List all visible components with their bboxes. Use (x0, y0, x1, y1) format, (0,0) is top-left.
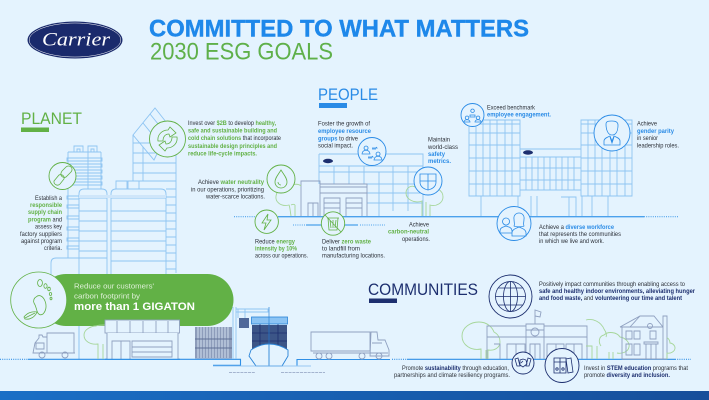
text: employee engagement (487, 106, 551, 118)
text: gender parity: Achieve (637, 122, 658, 128)
footer band (0, 391, 709, 400)
text: safety metrics (427, 138, 458, 165)
icon: water drop (267, 165, 295, 193)
icon: recycle arrows (150, 121, 186, 157)
text: diverse workforce (539, 225, 621, 245)
text: $2B investment goal: cold chain solutions that incorporate (188, 136, 282, 142)
text: positively impact communities: safe and healthy indoor environments, alleviating hunger (539, 289, 696, 295)
title: COMMITTED TO WHAT MATTERS (149, 16, 529, 42)
text: energy intensity (255, 240, 308, 260)
text: responsible supply chain: Establish a (35, 196, 63, 202)
icon: gender parity leader (594, 115, 630, 151)
heading: COMMUNITIES: COMMUNITIES (368, 280, 478, 299)
text: water neutrality (191, 180, 265, 200)
icon: employee resource groups (358, 138, 386, 166)
heading: PLANET: PLANET (21, 109, 82, 128)
text: diverse workforce: that represents the communities (539, 232, 621, 238)
text: positively impact communities (539, 282, 696, 302)
text: gender parity: in senior (637, 136, 658, 142)
text: carbon-neutral (388, 222, 430, 243)
text: employee engagement: Exceed benchmark (487, 106, 536, 112)
text: promote sustainability (394, 366, 510, 379)
icon: binders (545, 348, 579, 382)
text: $2B investment goal: reduce life-cycle impacts. (188, 152, 257, 158)
text: responsible supply chain: supply chain (28, 210, 62, 216)
text: positively impact communities: Positively impact communities through enabling access to (539, 282, 686, 288)
icon: globe (489, 275, 532, 318)
text: gender parity: leadership roles. (637, 144, 679, 150)
text: safety metrics: Maintain (428, 138, 450, 144)
logo: Carrier: Carrier (42, 30, 111, 50)
text: gender parity (637, 122, 679, 150)
callout: 1 gigaton pill: Reduce our customers' (74, 282, 155, 290)
text: responsible supply chain: assess key (35, 224, 62, 230)
illustration: headquarters office (469, 120, 632, 217)
text: employee resource groups: social impact. (318, 144, 353, 150)
text: water neutrality: water-scarce locations. (205, 194, 265, 200)
illustration: container yard and crane (195, 307, 268, 359)
text: safety metrics: world-class (427, 145, 458, 151)
callout: 1 gigaton pill (11, 272, 234, 328)
callout: 1 gigaton pill: carbon footprint by (74, 292, 140, 300)
text: employee resource groups: employee resource (318, 129, 372, 135)
icon: diverse workforce (497, 206, 531, 240)
ground lines (0, 217, 691, 366)
text: zero waste: to landfill from (322, 246, 360, 252)
text: diverse workforce: Achieve a diverse workforce (539, 225, 615, 231)
icon: engagement team (461, 104, 484, 126)
text: $2B investment goal (188, 121, 282, 158)
illustration: semi truck (311, 332, 389, 359)
icon: safety shield (414, 167, 442, 195)
text: promote sustainability: partnerships and climate resiliency programs. (394, 373, 510, 379)
text: water neutrality: Achieve water neutrality (198, 180, 265, 186)
text: carbon-neutral: carbon-neutral (388, 230, 429, 236)
text: responsible supply chain: criteria. (44, 246, 62, 252)
text: responsible supply chain: against program (21, 239, 62, 245)
text: energy intensity: Reduce energy (255, 240, 296, 246)
icon: footprint leaf (24, 280, 52, 319)
text: employee resource groups: groups to drive (318, 136, 359, 142)
text: responsible supply chain: factory suppliers (20, 232, 62, 238)
title: 2030 ESG GOALS (150, 38, 333, 66)
illustration: delivery truck (33, 333, 75, 358)
title (149, 16, 529, 66)
text: employee resource groups: Foster the growth of (318, 122, 370, 128)
illustration: house (620, 316, 675, 359)
icon: chain link (49, 162, 76, 190)
text: employee engagement: employee engagement. (487, 112, 551, 118)
text: STEM education: Invest in STEM education programs that (584, 366, 688, 372)
text: promote sustainability: Promote sustainability through education, (402, 366, 509, 372)
text: STEM education (584, 366, 688, 379)
text: $2B investment goal: sustainable design principles and (188, 144, 277, 150)
text: diverse workforce: in which we live and work. (539, 239, 604, 245)
text: gender parity: gender parity (637, 129, 675, 135)
illustration: cargo ship (213, 307, 325, 372)
text: energy intensity: intensity by 10% (255, 246, 298, 252)
text: carbon-neutral: Achieve (409, 222, 430, 228)
text: $2B investment goal: safe and sustainable building and (188, 128, 277, 134)
text: safety metrics: safety (428, 152, 446, 158)
text: responsible supply chain: responsible (30, 203, 63, 209)
text: positively impact communities: and food waste, and volunteering our time and talent (539, 296, 682, 302)
text: $2B investment goal: Invest over $2B to develop healthy, (188, 121, 276, 127)
logo: Carrier (28, 22, 122, 58)
text: zero waste: Deliver zero waste (322, 240, 372, 246)
text: zero waste (322, 240, 385, 260)
icon: crossed-out trash can (321, 212, 345, 235)
illustration: school and trees (462, 310, 629, 359)
text: STEM education: promote diversity and inclusion. (584, 373, 670, 379)
heading: PEOPLE: PEOPLE (318, 85, 378, 104)
text: responsible supply chain (20, 196, 63, 252)
illustration: store and tree (84, 320, 180, 359)
text: safety metrics: metrics. (428, 159, 451, 165)
callout: 1 gigaton pill: more than 1 GIGATON (74, 301, 195, 313)
text: water neutrality: in our operations, prioritizing (191, 188, 264, 194)
text: zero waste: manufacturing locations. (322, 254, 385, 260)
text: responsible supply chain: program and (28, 218, 62, 224)
icon: handshake (512, 352, 534, 374)
text: carbon-neutral: operations. (402, 237, 430, 243)
icon: lightning bolt (255, 210, 278, 233)
text: energy intensity: across our operations. (255, 254, 308, 260)
illustration: planet towers (51, 108, 176, 359)
illustration: factory and office (276, 154, 443, 217)
text: employee resource groups (318, 122, 372, 150)
